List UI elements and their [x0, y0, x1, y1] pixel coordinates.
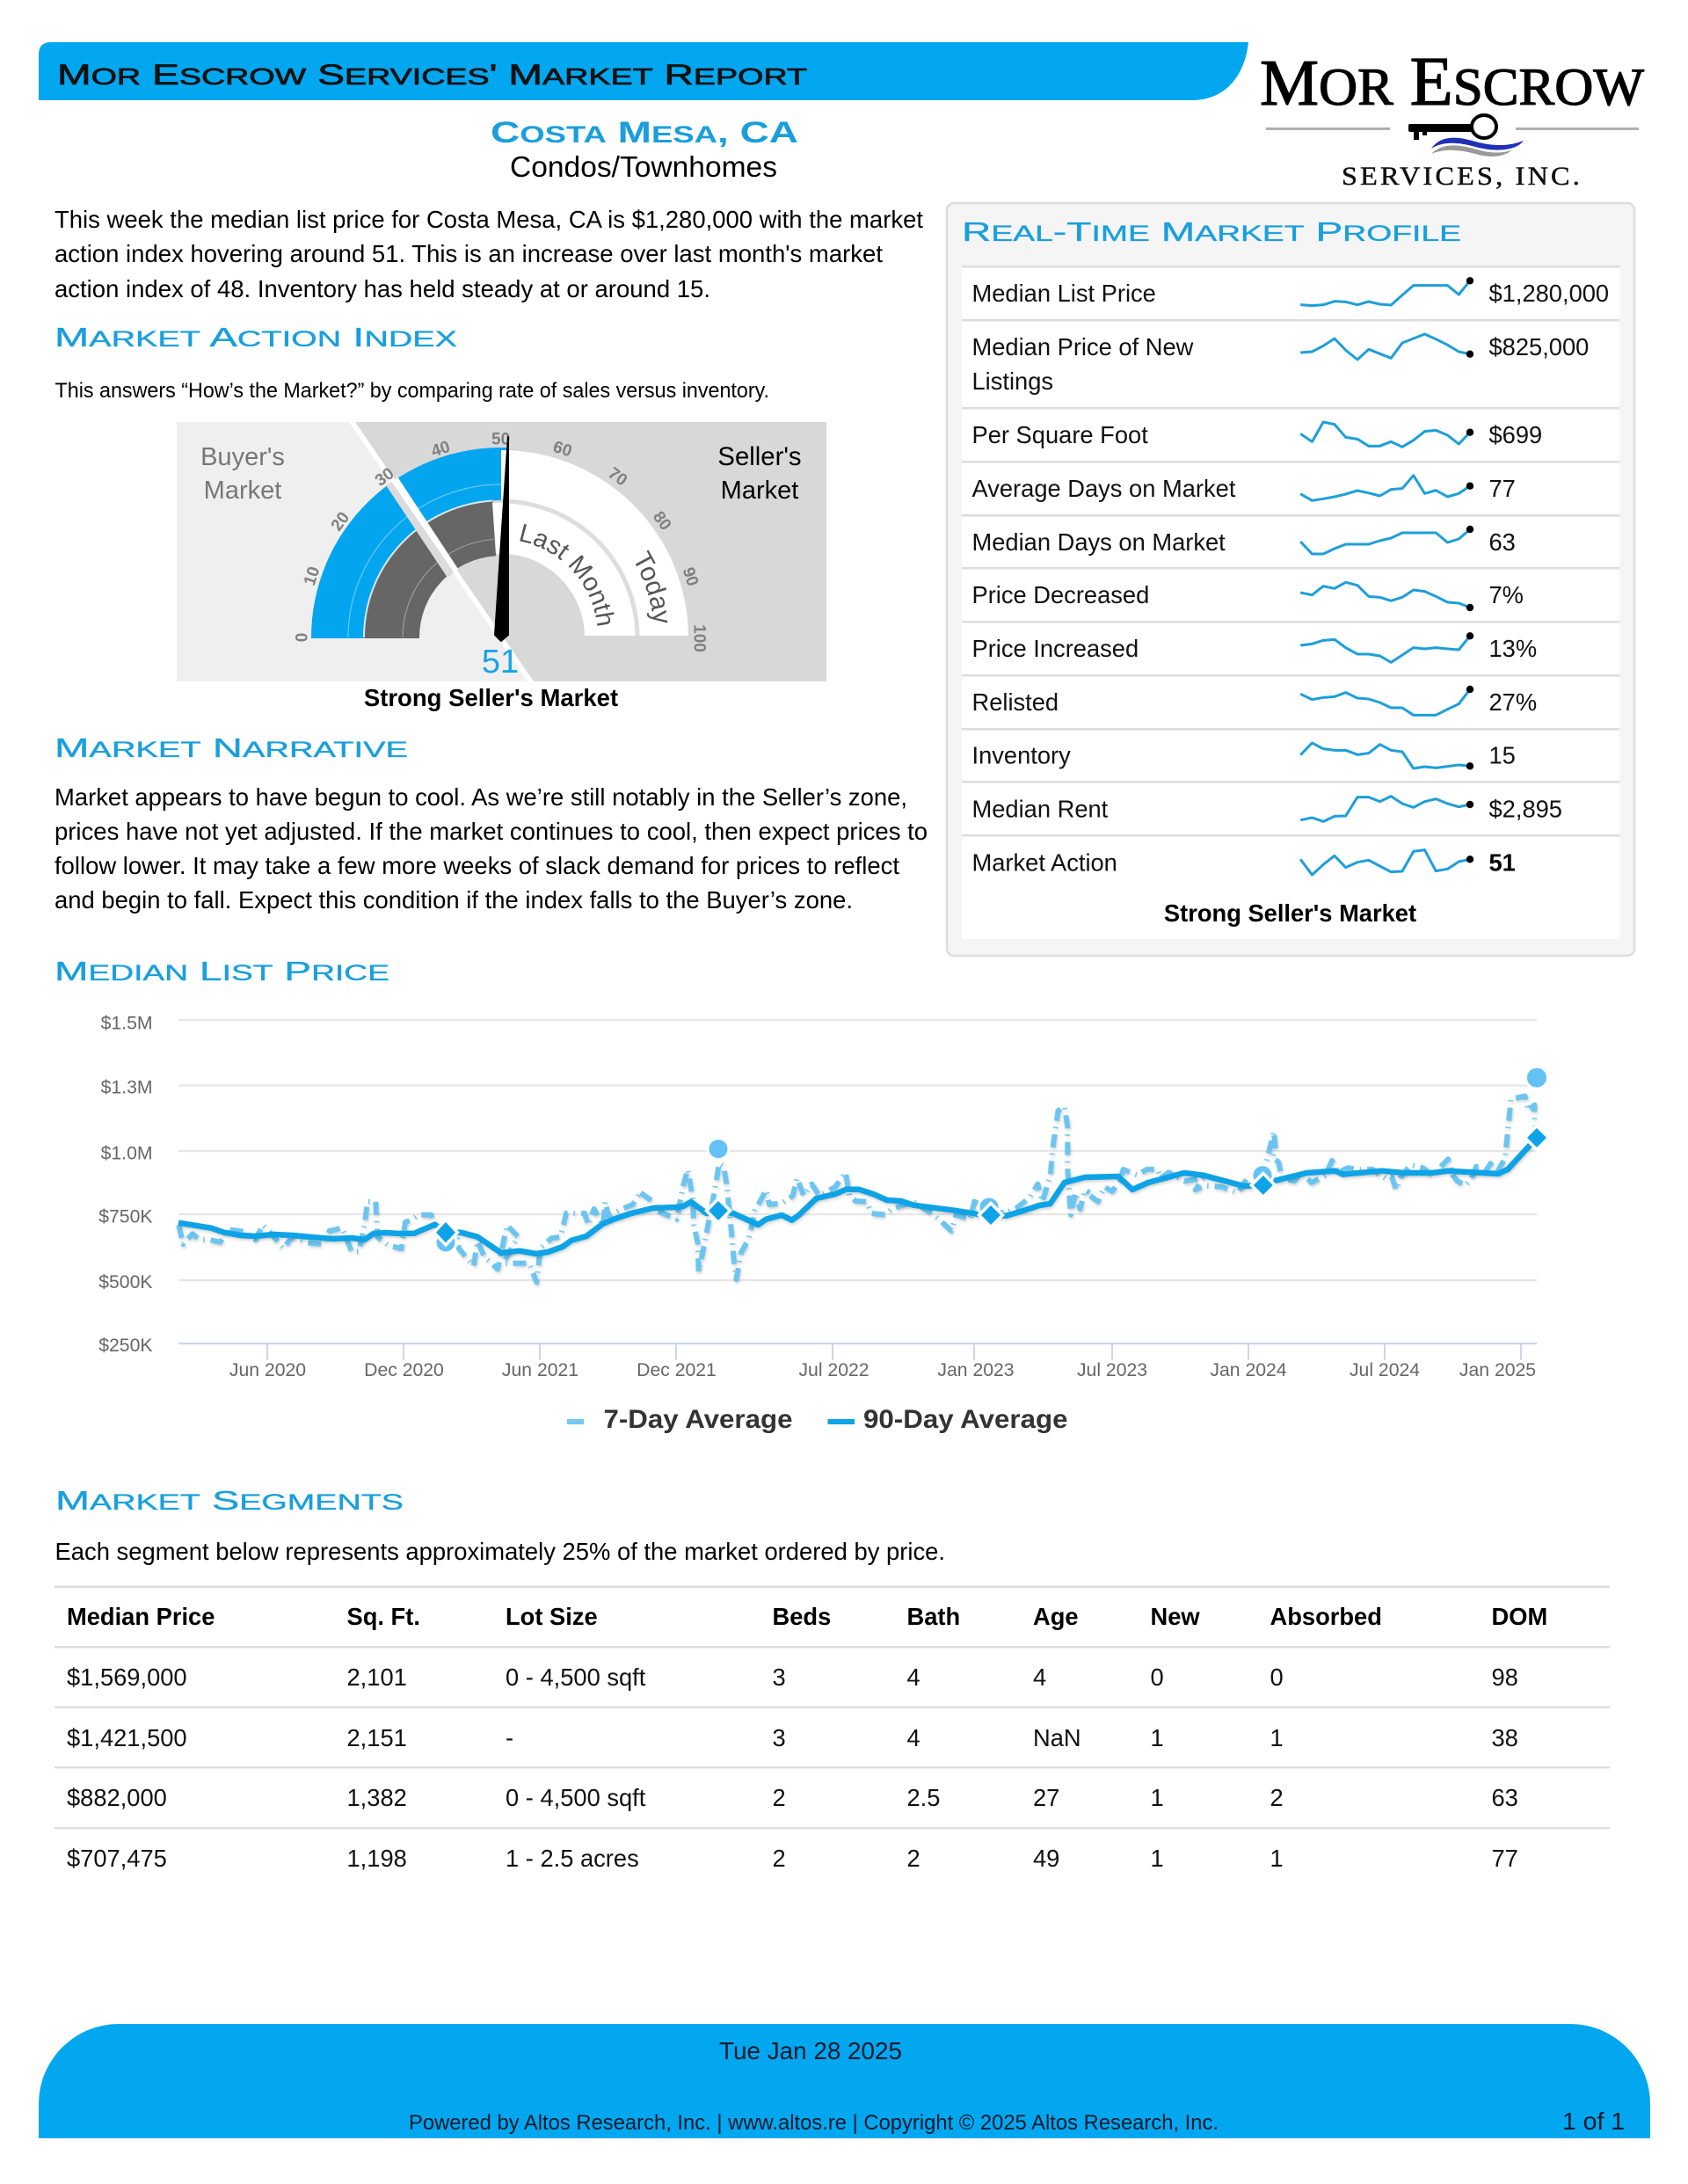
gauge scale ticks: 70 [605, 464, 630, 490]
y axis grid and labels: $1.3M [101, 1078, 153, 1097]
table row 1: 0 [1150, 1663, 1164, 1691]
y axis grid and labels: $1.0M [101, 1143, 153, 1164]
row: median price of new listings: $825,000 [1489, 333, 1589, 360]
gauge: market action index [177, 422, 826, 681]
row: relisted: 27% [1489, 688, 1537, 716]
table row 1: 3 [772, 1663, 786, 1691]
y axis grid and labels: $500K [98, 1272, 153, 1292]
x axis ticks and labels: Dec 2021 [637, 1360, 717, 1380]
row: market action [972, 849, 1516, 876]
7-day markers [435, 1067, 1547, 1253]
row: price increased [972, 632, 1537, 662]
row: median days on market: Median Days on Market [972, 528, 1226, 556]
gauge scale ticks: 20 [328, 509, 353, 535]
table row 4 [67, 1845, 1518, 1872]
logo: Mor Escrow Services [1260, 37, 1644, 191]
y axis grid and labels: $750K [98, 1206, 153, 1227]
row: price increased: Price Increased [972, 635, 1139, 662]
narrative paragraph: follow lower. It may take a few more weeks of slack demand for prices to reflect [55, 852, 899, 879]
logo: Mor Escrow Services: SERVICES, INC. [1342, 162, 1582, 191]
table row 1: 0 - 4,500 sqft [506, 1663, 646, 1691]
buyer/seller boundary strip [387, 477, 458, 578]
line chart: median list price [98, 1014, 1547, 1380]
series: 7-day average [178, 1096, 1537, 1282]
footer credit: Powered by Altos Research, Inc. | www.altos.re | Copyright © 2025 Altos Research, Inc. [409, 2111, 1219, 2135]
table row 2 [67, 1724, 1518, 1751]
row: median list price: Median List Price [972, 280, 1156, 307]
panel caption: Strong Seller's Market [1164, 899, 1416, 927]
narrative paragraph: and begin to fall. Expect this condition if the index falls to the Buyer’s zone. [55, 886, 853, 914]
banner title: M or E scrow S ervices ' M arket R eport [57, 55, 807, 91]
table: market segments [55, 1586, 1610, 1872]
table row 2: 3 [772, 1724, 786, 1751]
market action description: This answers “How’s the Market?” by comparing rate of sales versus inventory. [55, 379, 769, 403]
intro paragraph: This week the median list price for Costa Mesa, CA is $1,280,000 with the market [55, 206, 923, 233]
gauge scale ticks: 10 [301, 564, 324, 588]
table row 2: NaN [1033, 1724, 1081, 1751]
table row 3: 1 [1150, 1784, 1164, 1811]
y axis grid and labels [98, 1014, 1537, 1356]
gauge needle [495, 437, 508, 641]
x axis ticks and labels: Jun 2021 [502, 1360, 578, 1380]
row: median rent: Median Rent [972, 795, 1109, 823]
row: median price of new listings: Median Price of New [972, 333, 1194, 360]
table header: Lot Size [506, 1603, 598, 1630]
row: price decreased: Price Decreased [972, 581, 1149, 608]
x axis ticks and labels: Jan 2024 [1210, 1360, 1287, 1380]
row: price decreased: 7% [1489, 581, 1524, 608]
gauge scale ticks: 0 [293, 633, 311, 642]
table row 1: 4 [907, 1663, 920, 1691]
row: median list price [972, 277, 1609, 307]
row: market action: 51 [1489, 849, 1516, 876]
row: median rent [972, 795, 1562, 823]
intro paragraph: action index hovering around 51. This is an increase over last month's market [55, 240, 883, 267]
label: seller's market [717, 442, 802, 505]
x axis ticks and labels [178, 1343, 1537, 1380]
header banner [39, 42, 1248, 100]
row: average days on market: 77 [1489, 475, 1516, 502]
table row 4: 1 - 2.5 acres [506, 1845, 639, 1872]
row: per square foot [972, 421, 1542, 448]
table header: Bath [907, 1603, 960, 1630]
table row 3: 2 [1270, 1784, 1284, 1811]
table row 3: 27 [1033, 1784, 1059, 1811]
row: median price of new listings: Listings [972, 368, 1053, 395]
footer banner [39, 2024, 1650, 2138]
table row 1: 4 [1033, 1663, 1046, 1691]
label: buyer's market: Market [204, 477, 281, 505]
table row 4: $707,475 [67, 1845, 167, 1872]
table row 2: 38 [1491, 1724, 1518, 1751]
table row 1: 2,101 [346, 1663, 407, 1691]
location title: Costa M esa , CA [491, 113, 798, 150]
row: per square foot: Per Square Foot [972, 421, 1148, 448]
table header: Absorbed [1270, 1603, 1382, 1630]
row: median price of new listings [972, 333, 1589, 395]
gauge scale ticks: 100 [689, 624, 708, 652]
row: inventory: Inventory [972, 742, 1071, 768]
x axis ticks and labels: Jun 2020 [229, 1360, 306, 1380]
table row 2: 1 [1150, 1724, 1164, 1751]
row: median list price: $1,280,000 [1489, 280, 1609, 307]
heading: market narrative: M arket N arrative [55, 729, 408, 764]
gauge scale ticks: 80 [649, 508, 674, 534]
chart legend: 90-Day Average [863, 1405, 1067, 1434]
table row 2: 2,151 [346, 1724, 407, 1751]
row: relisted [972, 686, 1537, 716]
row: median days on market [972, 526, 1516, 556]
table row 4: 49 [1033, 1845, 1059, 1872]
row: inventory [972, 742, 1516, 770]
label: seller's market: Seller's [717, 442, 802, 471]
page number: 1 of 1 [1562, 2108, 1625, 2135]
series: 90-day average [178, 1138, 1537, 1254]
table row 2: - [506, 1724, 513, 1751]
y axis grid and labels: $1.5M [101, 1014, 153, 1034]
chart legend: 7-Day Average [603, 1405, 793, 1434]
table row 4: 1 [1150, 1845, 1164, 1872]
table row 2: 4 [907, 1724, 920, 1751]
gauge caption: Strong Seller's Market [364, 684, 618, 711]
table row 4: 1,198 [346, 1845, 407, 1872]
row: relisted: Relisted [972, 688, 1059, 716]
row dividers [962, 266, 1619, 837]
panel heading: R eal -T ime M arket P rofile [962, 213, 1461, 248]
90-day markers [436, 1128, 1546, 1242]
table row 4: 1 [1270, 1845, 1284, 1872]
row: market action: Market Action [972, 849, 1117, 876]
gauge scale ticks: 90 [679, 565, 702, 588]
market segments description: Each segment below represents approximately 25% of the market ordered by price. [55, 1538, 945, 1565]
gauge scale ticks [293, 431, 708, 652]
x axis ticks and labels: Dec 2020 [364, 1360, 444, 1380]
narrative paragraph: Market appears to have begun to cool. As we’re still notably in the Seller’s zone, [55, 783, 907, 811]
heading: market segments: M arket S egments [55, 1481, 404, 1517]
x axis ticks and labels: Jan 2025 [1459, 1360, 1536, 1380]
curved label: today: Today [635, 550, 668, 622]
table header: Age [1033, 1603, 1079, 1630]
table header: Sq. Ft. [346, 1603, 420, 1630]
table header [67, 1603, 1547, 1630]
x axis ticks and labels: Jul 2022 [798, 1360, 869, 1380]
label: seller's market: Market [721, 477, 798, 505]
property type subtitle: Condos/Townhomes [510, 150, 777, 183]
row: inventory: 15 [1489, 742, 1516, 768]
table row 3: 0 - 4,500 sqft [506, 1784, 646, 1811]
label: buyer's market: Buyer's [200, 443, 285, 471]
narrative paragraph [55, 783, 928, 914]
row: average days on market: Average Days on Market [972, 475, 1236, 502]
table header: New [1150, 1603, 1200, 1630]
gauge scale ticks: 30 [372, 464, 397, 491]
table row 2: $1,421,500 [67, 1724, 187, 1751]
x axis ticks and labels: Jan 2023 [937, 1360, 1015, 1380]
table header: Median Price [67, 1603, 215, 1630]
row: per square foot: $699 [1489, 421, 1542, 448]
footer date: Tue Jan 28 2025 [719, 2037, 902, 2064]
heading: market action index: M arket A ction I ndex [55, 318, 457, 353]
gauge remaining bands (white) [492, 450, 688, 636]
label: buyer's market [200, 443, 285, 505]
row: median days on market: 63 [1489, 528, 1516, 556]
table row 3: 63 [1491, 1784, 1518, 1811]
row: median rent: $2,895 [1489, 795, 1562, 823]
table row 4: 2 [907, 1845, 920, 1872]
gauge today arc (blue) [311, 448, 507, 638]
chart legend [567, 1405, 1067, 1434]
intro paragraph [55, 206, 923, 302]
row: price increased: 13% [1489, 635, 1537, 662]
table row 2: 1 [1270, 1724, 1284, 1751]
row: average days on market [972, 475, 1516, 502]
table row 3: 2 [772, 1784, 786, 1811]
gauge scale ticks: 60 [550, 438, 574, 461]
table header: Beds [772, 1603, 831, 1630]
narrative paragraph: prices have not yet adjusted. If the market continues to cool, then expect prices to [55, 818, 928, 845]
table row 4: 77 [1491, 1845, 1518, 1872]
gauge last month arc (gray) [364, 500, 496, 638]
table row 3: 1,382 [346, 1784, 407, 1811]
gauge scale ticks: 50 [491, 431, 510, 449]
heading: median list price: M edian L ist P rice [55, 952, 389, 987]
gauge scale ticks: 40 [429, 438, 453, 461]
y axis grid and labels: $250K [98, 1336, 153, 1356]
table row 1: $1,569,000 [67, 1663, 187, 1691]
x axis ticks and labels: Jul 2024 [1350, 1360, 1420, 1380]
table row 1 [67, 1663, 1518, 1691]
table row 3: $882,000 [67, 1784, 167, 1811]
gauge value: 51 [482, 644, 519, 681]
table row 3 [67, 1784, 1518, 1811]
logo: Mor Escrow Services: Mor Escrow [1260, 37, 1644, 121]
table row 1: 98 [1491, 1663, 1518, 1691]
panel: real-time market profile [947, 203, 1634, 956]
table row 3: 2.5 [907, 1784, 940, 1811]
table header: DOM [1491, 1603, 1547, 1630]
table row 1: 0 [1270, 1663, 1284, 1691]
curved label: last month: Last Month [520, 524, 615, 626]
table row 4: 2 [772, 1845, 786, 1872]
intro paragraph: action index of 48. Inventory has held steady at or around 15. [55, 275, 710, 302]
x axis ticks and labels: Jul 2023 [1077, 1360, 1147, 1380]
row: price decreased [972, 581, 1524, 611]
